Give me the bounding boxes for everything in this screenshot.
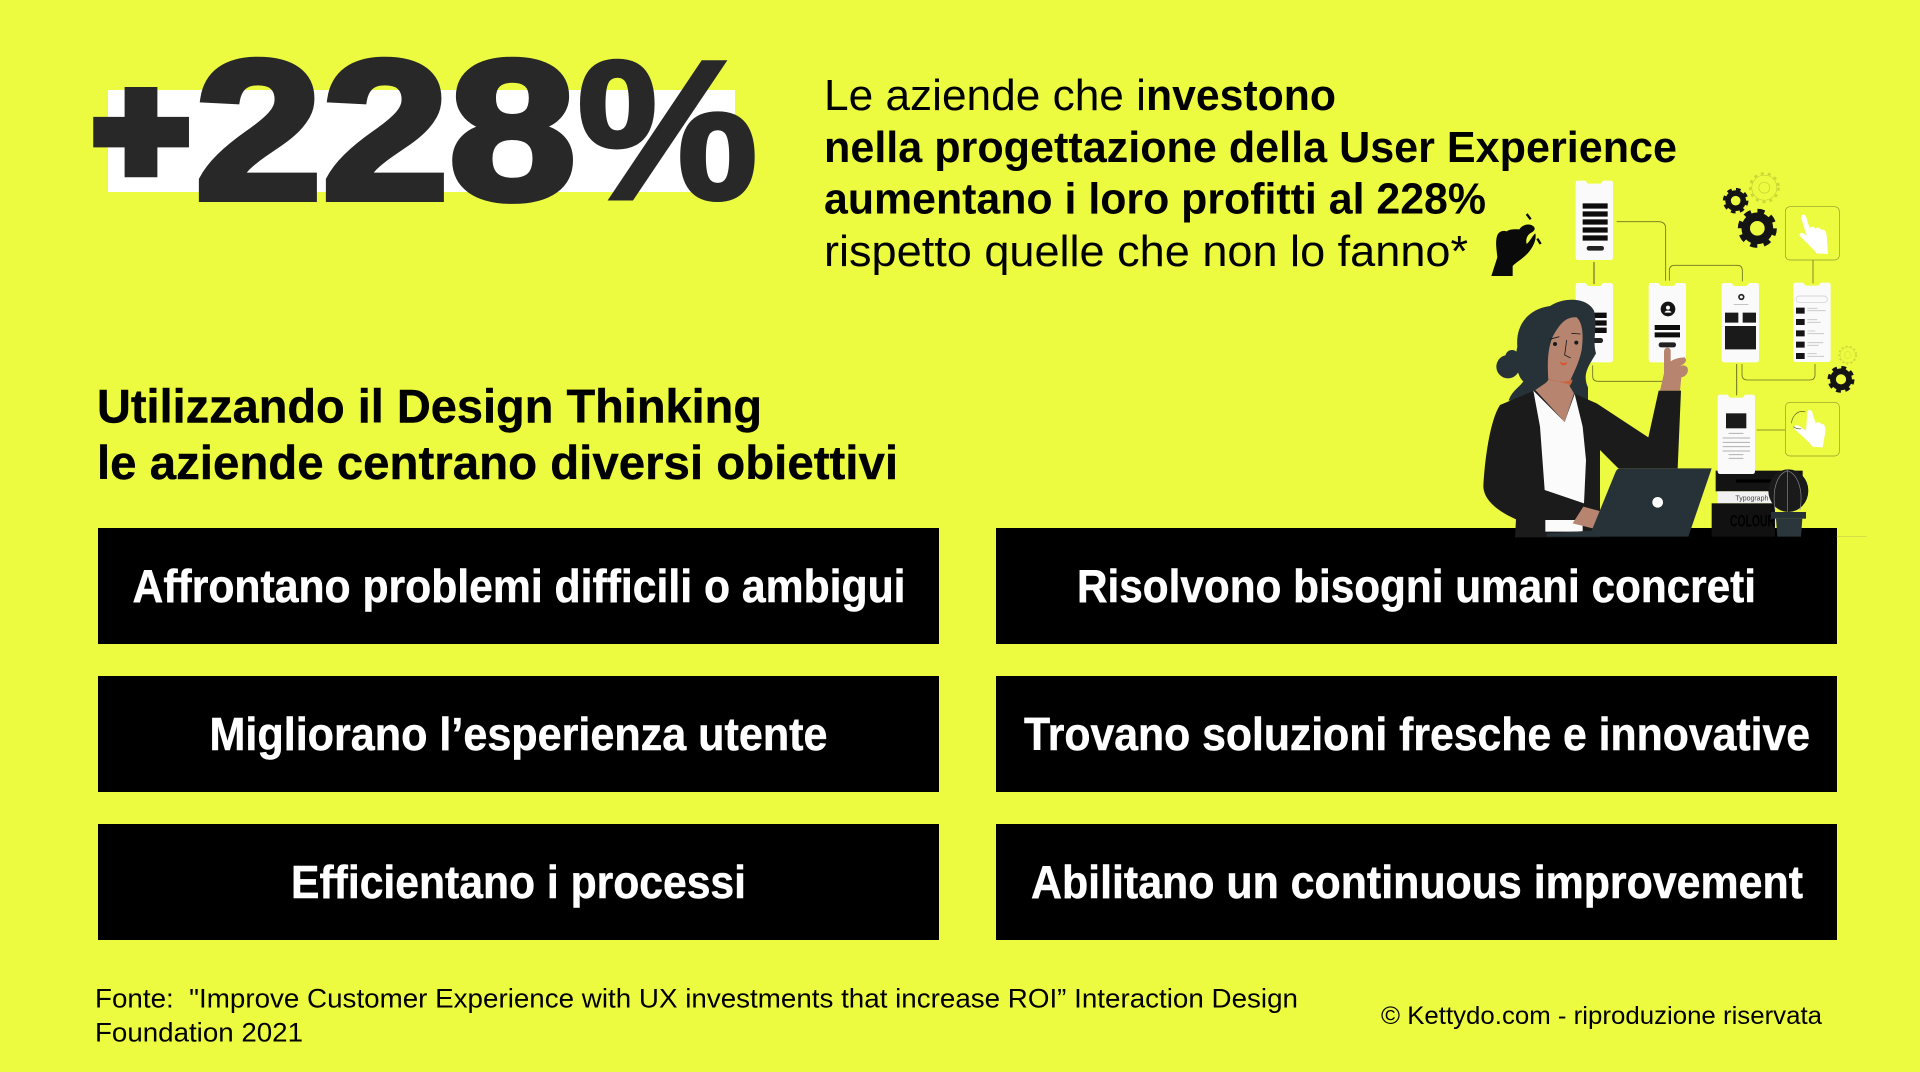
books and cactus (1712, 469, 1808, 537)
line 1: nvestono (1146, 71, 1336, 120)
source footnote (95, 984, 1298, 1048)
jacket (1483, 391, 1681, 537)
books and cactus: COLOUR (1730, 512, 1775, 531)
box: Risolvono bisogni (996, 528, 1837, 644)
footnote line 1: Fonte: "Improve Customer Experience with UX investments that increase ROI” Interaction Design (95, 984, 1298, 1014)
white highlight behind number (108, 90, 735, 192)
woman character (1483, 300, 1712, 537)
heading line 2: le aziende centrano diversi obiettivi (97, 436, 898, 489)
wireframe phone: login (1576, 283, 1613, 362)
gears (1725, 173, 1856, 391)
wireframe phone: article (1718, 395, 1755, 474)
line 4: rispetto quelle che non lo fanno* (824, 227, 1468, 276)
box: Risolvono bisogni: Risolvono bisogni umani concreti (1077, 560, 1756, 612)
percent sign: % (577, 20, 758, 240)
section heading (97, 380, 898, 489)
neck and chest (1535, 380, 1574, 422)
shirt (1533, 391, 1586, 503)
icon: pinch hand (1491, 214, 1541, 276)
gesture card: tap (1785, 207, 1839, 260)
line 1 (824, 71, 1336, 120)
intro statement (824, 71, 1677, 276)
lower hand (1573, 507, 1603, 529)
wireframe connectors (1593, 222, 1815, 430)
heading line 1: Utilizzando il Design Thinking (97, 380, 762, 432)
desk line (1837, 536, 1867, 538)
big statistic +228% (94, 20, 758, 240)
box: Migliorano esperienza: Migliorano l’esperienza utente (210, 708, 828, 760)
line 2: nella progettazione della User Experience (824, 123, 1677, 172)
gesture card: rotate (1785, 402, 1839, 456)
wireframe phone: search list (1793, 283, 1831, 362)
plus sign: + (94, 46, 188, 214)
box: Migliorano esperienza (98, 676, 939, 792)
box: Affrontano problemi: Affrontano problemi difficili o ambigui (132, 560, 906, 612)
wireframe phone: profile (1649, 283, 1686, 362)
box: Efficientano (98, 824, 939, 940)
pointing arm (1660, 348, 1688, 391)
box: Efficientano: Efficientano i processi (291, 856, 746, 908)
line 3: aumentano i loro profitti al 228% (824, 174, 1486, 224)
wireframe phone: list bars (1576, 181, 1613, 260)
box: Abilitano: Abilitano un continuous improvement (1031, 856, 1803, 908)
wireframe phone: gallery (1722, 283, 1759, 362)
box: Trovano soluzioni: Trovano soluzioni fresche e innovative (1024, 708, 1810, 760)
box: Trovano soluzioni (996, 676, 1837, 792)
illustration: UX designer and wireframes (1483, 173, 1867, 537)
hair (1509, 300, 1596, 401)
footnote line 2: Foundation 2021 (95, 1018, 303, 1048)
copyright: © Kettydo.com - riproduzione riservata (1381, 1002, 1822, 1030)
books and cactus: Typograph (1735, 496, 1768, 503)
hair bun (1496, 350, 1520, 378)
face (1537, 317, 1583, 397)
box: Affrontano problemi (98, 528, 939, 644)
line 1: Le aziende che i (824, 71, 1146, 120)
digits 228: 228 (195, 20, 576, 240)
laptop (1547, 468, 1712, 537)
box: Abilitano (996, 824, 1837, 940)
